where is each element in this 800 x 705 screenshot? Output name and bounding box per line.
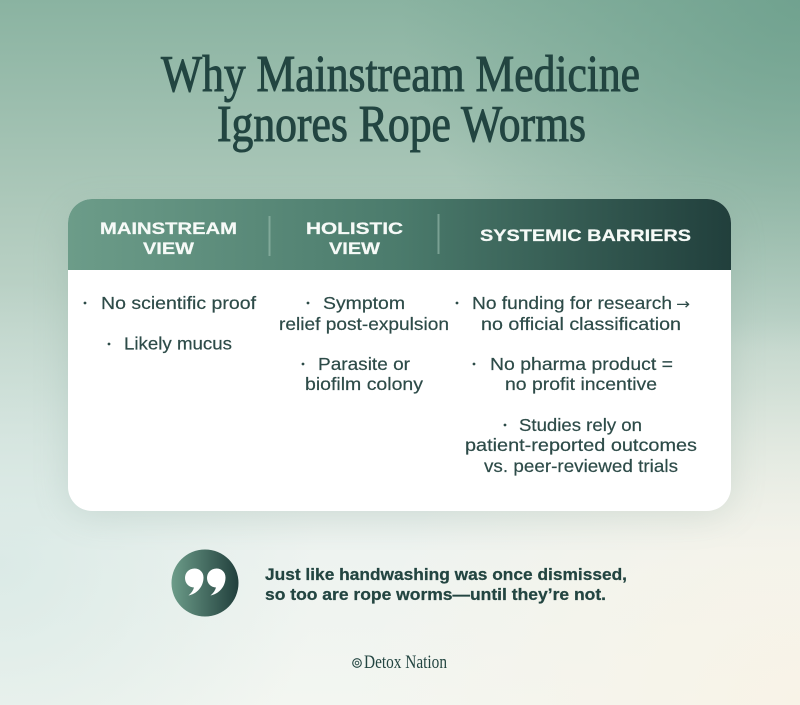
column: systemic barriers: No funding for research xyxy=(472,293,672,313)
title: Ignores Rope Worms xyxy=(217,96,586,153)
heading: holistic view: HOLISTIC xyxy=(306,219,403,238)
callout: quote text xyxy=(265,566,627,604)
column: systemic barriers: → xyxy=(676,295,690,313)
card body xyxy=(68,199,731,511)
column: holistic view: Symptom xyxy=(323,293,405,313)
column: holistic view: relief post-expulsion xyxy=(279,314,449,334)
table header band xyxy=(68,199,731,270)
column: systemic barriers: Studies rely on xyxy=(519,415,642,435)
card shadow xyxy=(68,210,731,515)
column: systemic barriers: vs. peer-reviewed trials xyxy=(484,456,678,476)
heading: holistic view xyxy=(306,219,403,258)
column: holistic view: biofilm colony xyxy=(305,374,423,394)
heading: mainstream view: MAINSTREAM xyxy=(100,219,237,238)
column: systemic barriers xyxy=(456,293,697,476)
callout: quote text: so too are rope worms—until they’re not. xyxy=(265,586,606,604)
column: systemic barriers: patient-reported outcomes xyxy=(465,435,697,455)
logo: Detox Nation: Detox Nation xyxy=(364,652,447,673)
column: systemic barriers: no profit incentive xyxy=(505,374,657,394)
callout: quote text: Just like handwashing was once dismissed, xyxy=(265,566,627,584)
column: holistic view: Parasite or xyxy=(318,354,410,374)
heading: mainstream view xyxy=(100,219,237,258)
heading: systemic barriers: SYSTEMIC BARRIERS xyxy=(480,226,691,245)
heading: holistic view: VIEW xyxy=(329,239,381,258)
title xyxy=(161,46,640,153)
column: mainstream view: No scientific proof xyxy=(101,293,256,313)
column: systemic barriers: no official classification xyxy=(481,314,681,334)
column: mainstream view xyxy=(84,293,256,354)
column: holistic view xyxy=(279,293,449,394)
title: Why Mainstream Medicine xyxy=(161,46,640,103)
column: mainstream view: Likely mucus xyxy=(124,334,232,354)
icon: quotation mark xyxy=(172,550,238,616)
heading: mainstream view: VIEW xyxy=(143,239,195,258)
column: systemic barriers: No pharma product = xyxy=(490,354,673,374)
panel: comparison table xyxy=(68,199,731,515)
